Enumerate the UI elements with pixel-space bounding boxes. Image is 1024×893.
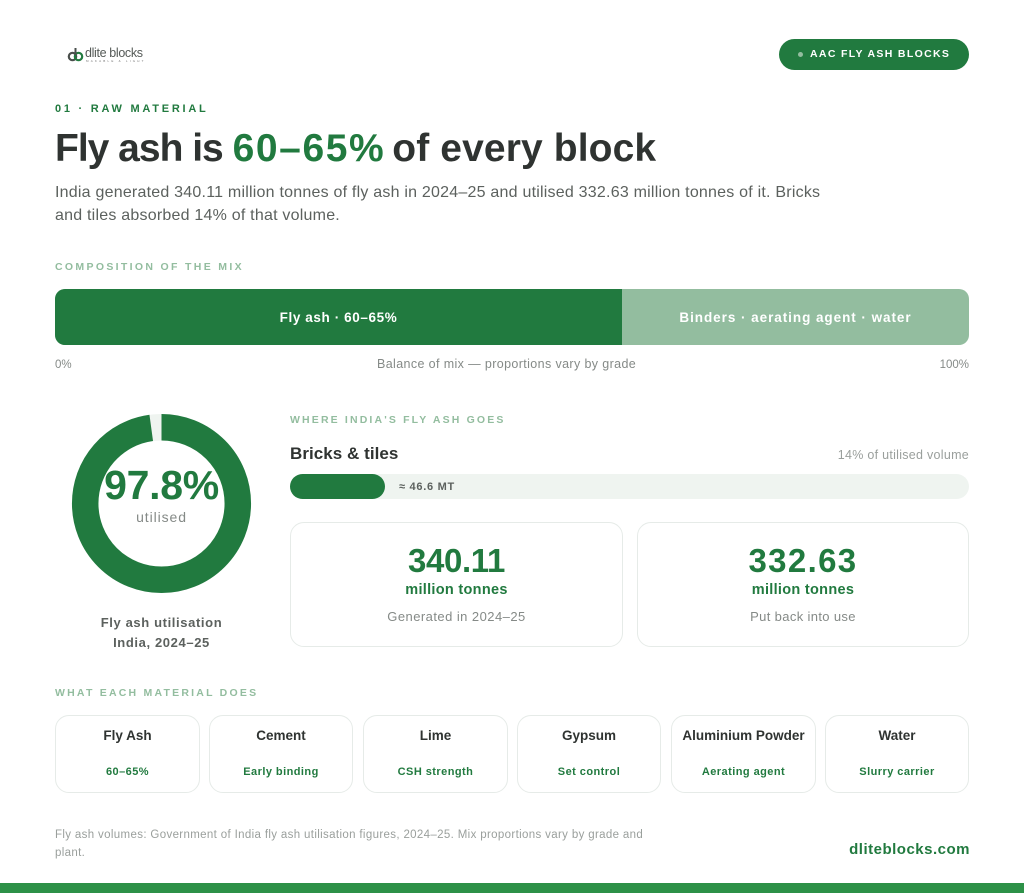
logo: dlite blocks: MAKABLE & LIGHT (86, 59, 146, 63)
badge label: AAC FLY ASH BLOCKS (810, 48, 950, 60)
bar note: 14% of utilised volume (838, 448, 969, 462)
material card: cement (209, 715, 353, 793)
stat card: put back (637, 522, 969, 647)
stat value: 332.63 (748, 542, 858, 579)
stat caption: Generated in 2024–25 (387, 609, 526, 624)
material card: gypsum (517, 715, 661, 793)
material role: Aerating agent (702, 766, 785, 778)
stat card: generated (290, 522, 623, 647)
donut caption: utilised (136, 509, 187, 525)
axis label balance: Balance of mix — proportions vary by grade (377, 357, 636, 371)
material role: CSH strength (398, 766, 473, 778)
stat unit: million tonnes (752, 582, 854, 598)
badge: AAC fly ash blocks (779, 39, 969, 70)
material name: Lime (420, 728, 451, 743)
source note: Fly ash volumes: Government of India fly ash utilisation figures, 2024–25. Mix proportions vary by grade and (55, 829, 643, 841)
progress bar (290, 474, 969, 499)
material card: fly ash (55, 715, 200, 793)
donut value: 97.8% (104, 462, 219, 508)
segment: fly ash: Fly ash · 60–65% (280, 310, 397, 325)
material name: Fly Ash (103, 728, 152, 743)
material name: Water (878, 728, 916, 743)
donut label (101, 615, 222, 650)
composition bar (55, 289, 969, 345)
heading: what each material does: WHAT EACH MATERIAL DOES (55, 687, 258, 699)
intro text: India generated 340.11 million tonnes of fly ash in 2024–25 and utilised 332.63 million tonnes of it. Bricks (55, 184, 820, 201)
stat value: 340.11 (408, 542, 505, 579)
title: Fly ash is 60–65% of every block (55, 127, 656, 170)
eyebrow: 01 · RAW MATERIAL (55, 103, 208, 115)
material name: Gypsum (562, 728, 616, 743)
axis label 0%: 0% (55, 359, 72, 371)
source note: plant. (55, 847, 85, 859)
bar label: bricks and tiles: Bricks & tiles (290, 444, 398, 463)
source note (55, 829, 643, 859)
material role: Early binding (243, 766, 319, 778)
badge dot (798, 52, 803, 57)
material name: Cement (256, 728, 306, 743)
intro text (55, 184, 820, 224)
intro text: and tiles absorbed 14% of that volume. (55, 207, 340, 224)
stat unit: million tonnes (405, 582, 508, 598)
segment: fly ash (55, 289, 622, 345)
material name: Aluminium Powder (682, 728, 805, 743)
material role: Set control (558, 766, 620, 778)
progress value: ≈ 46.6 MT (399, 481, 455, 493)
donut chart (72, 414, 252, 593)
donut label: Fly ash utilisation (101, 615, 222, 630)
footer bar (0, 883, 1024, 893)
stat caption: Put back into use (750, 609, 856, 624)
material role: Slurry carrier (859, 766, 935, 778)
heading: where fly ash goes: WHERE INDIA'S FLY ASH GOES (290, 414, 506, 426)
progress fill (290, 474, 385, 499)
axis label 100%: 100% (940, 359, 969, 371)
material card: aluminium powder (671, 715, 816, 793)
heading: composition of the mix: COMPOSITION OF THE MIX (55, 261, 244, 273)
material card: water (825, 715, 969, 793)
material card: lime (363, 715, 508, 793)
donut label: India, 2024–25 (113, 635, 210, 650)
logo: dlite blocks: dlite blocks (85, 46, 143, 60)
website: dliteblocks.com (849, 841, 970, 858)
segment: binders: Binders · aerating agent · water (679, 310, 912, 325)
logo: dlite blocks (68, 46, 146, 63)
material role: 60–65% (106, 766, 149, 778)
